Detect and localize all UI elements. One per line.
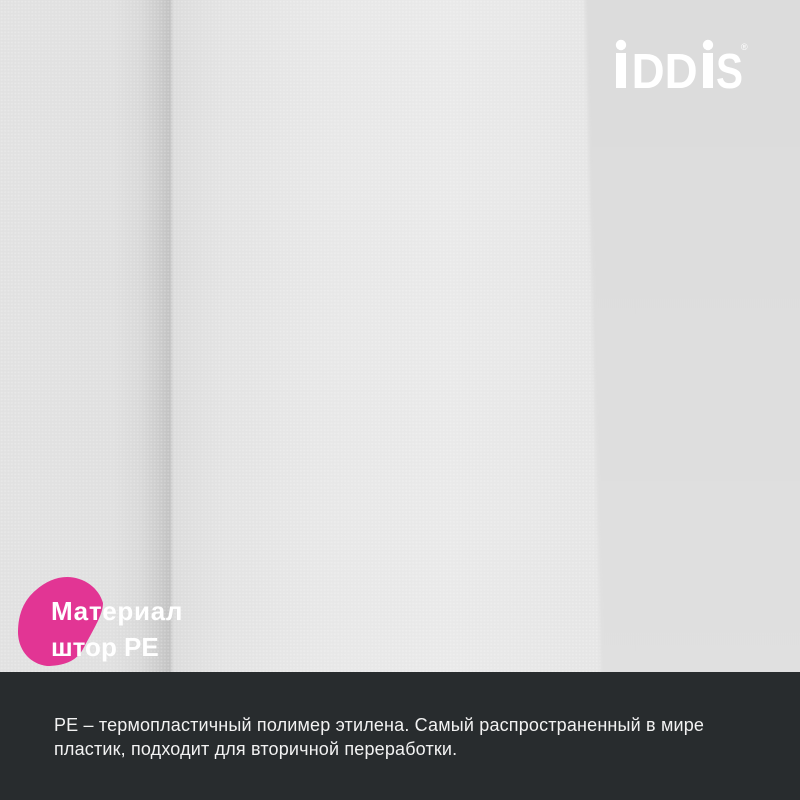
heading: material: штор PE [51, 632, 159, 662]
heading: material: Материал [51, 596, 183, 626]
panel: dark footer band [0, 672, 800, 800]
text: description: PE – термопластичный полимер этилена. Самый распространенный в мире [54, 715, 704, 735]
logo: iddis [616, 40, 748, 95]
icon: pink blob [18, 577, 103, 666]
heading: material [51, 596, 183, 662]
text: description [54, 715, 704, 759]
logo: iddis: ® [741, 42, 748, 52]
text: description: пластик, подходит для вторичной переработки. [54, 739, 457, 759]
